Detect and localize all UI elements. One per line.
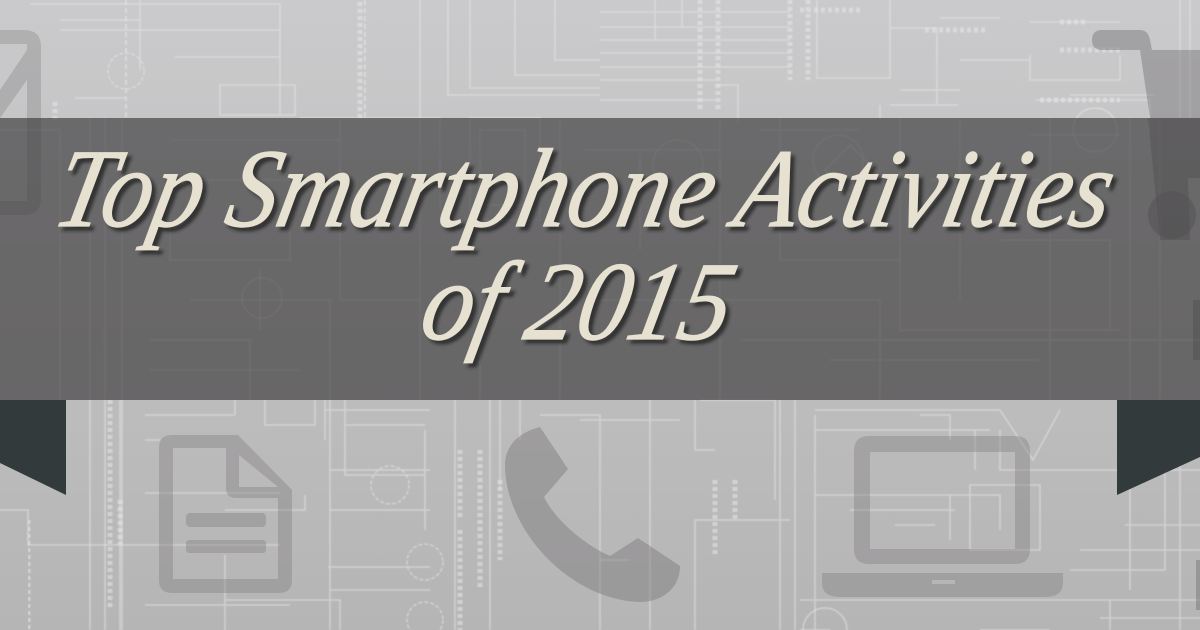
- ribbon fold left: [0, 400, 66, 495]
- title: of 2015: [416, 244, 750, 368]
- title: [45, 127, 1130, 368]
- title: of 2015: [412, 240, 746, 364]
- icon: document: [159, 435, 292, 593]
- icon: telephone handset: [505, 427, 680, 602]
- banner band: [0, 118, 1200, 400]
- icon: laptop: [822, 436, 1063, 597]
- ribbon fold right: [1117, 400, 1200, 495]
- icon: partial tablet with pen, top left: [0, 30, 41, 215]
- icon: partial shopping cart, top right: [1092, 30, 1200, 610]
